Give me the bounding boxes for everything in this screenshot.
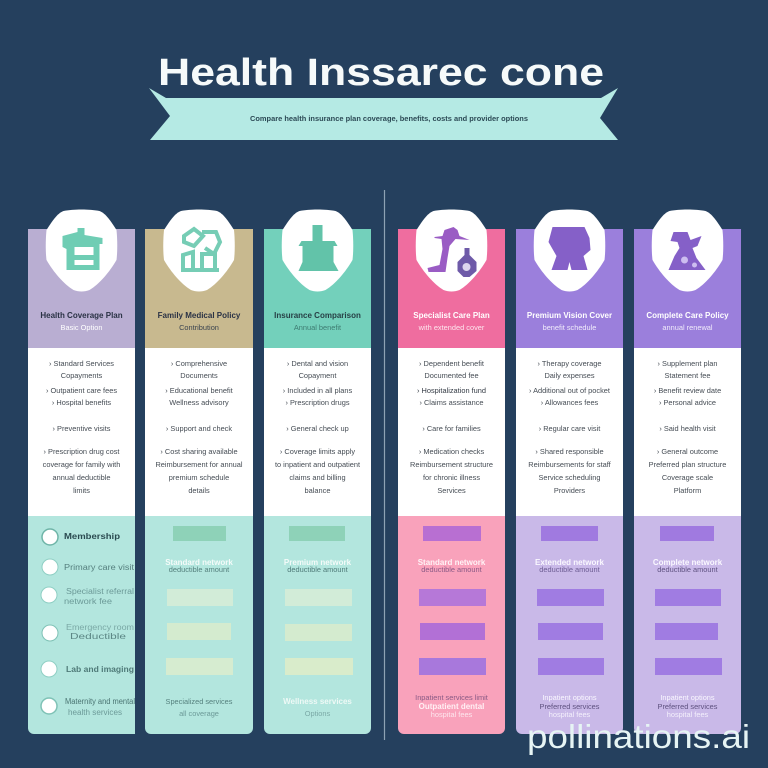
plan 1 feature list: network fee: [64, 597, 113, 606]
plan 1 details: annual deductible: [53, 473, 110, 482]
plan 4 details: › Hospitalization fund: [417, 386, 486, 395]
plan 6 feature bars: hospital fees: [667, 710, 709, 719]
plan 3 heading: Annual benefit: [294, 323, 341, 332]
plan 6 feature bars: Complete network: [653, 558, 723, 567]
plan 4 details: › Claims assistance: [419, 398, 484, 407]
plan 1 details: [43, 359, 120, 495]
plan 1 feature list: Lab and imaging: [66, 665, 134, 674]
plan 4 feature bars: Outpatient dental: [419, 702, 484, 711]
plan 3 details: balance: [305, 486, 330, 495]
plan 4 details: › Medication checks: [419, 447, 484, 456]
icon: plan 5: [534, 210, 605, 292]
plan 1 details: › Prescription drug cost: [44, 447, 120, 456]
plan 4 details: [410, 359, 493, 495]
plan 2 details: › Support and check: [166, 424, 232, 433]
plan 4 feature bars: hospital fees: [431, 710, 473, 719]
plan 6 heading: annual renewal: [662, 323, 713, 332]
plan 2 feature bars: Standard network: [165, 558, 233, 567]
plan 2 feature bars: Specialized services: [166, 697, 233, 706]
plan 5 feature bars: Extended network: [535, 558, 604, 567]
plan 4 feature bars: [415, 526, 488, 719]
plan 4 heading: with extended cover: [418, 323, 485, 332]
plan 5 details: › Additional out of pocket: [529, 386, 610, 395]
title: Health Inssarec cone: [158, 52, 604, 94]
plan 4 details: › Care for families: [422, 424, 481, 433]
plan 3 feature bars: Options: [305, 709, 331, 718]
plan 2 details: Documents: [180, 371, 218, 380]
plan 6 details: › General outcome: [657, 447, 718, 456]
plan 6 details: › Personal advice: [659, 398, 716, 407]
icon: plan 6: [652, 210, 723, 292]
plan 3 heading: [274, 311, 361, 332]
plan 5 details: Service scheduling: [538, 473, 601, 482]
plan 3 feature bars: Premium network: [284, 558, 352, 567]
plan 2 details: Wellness advisory: [169, 398, 229, 407]
plan 1 details: › Hospital benefits: [52, 398, 111, 407]
plan 3 details: › Included in all plans: [283, 386, 353, 395]
plan 6 feature bars: Inpatient options: [660, 693, 715, 702]
banner subtitle: Compare health insurance plan coverage, benefits, costs and provider options: [250, 114, 528, 123]
plan 1 feature list: Primary care visit: [64, 563, 135, 572]
plan 2 details: › Cost sharing available: [160, 447, 238, 456]
plan 3 feature bars: Wellness services: [283, 697, 352, 706]
plan 6 details: › Benefit review date: [654, 386, 721, 395]
panel: plan 6: [634, 210, 741, 734]
plan 6 details: [649, 359, 726, 495]
plan 5 details: [528, 359, 612, 495]
icon: plan 4: [416, 210, 487, 292]
ribbon banner with subtitle: [149, 88, 618, 140]
plan 6 details: Platform: [674, 486, 701, 495]
plan 5 heading: [527, 311, 612, 332]
plan 6 feature bars: [653, 526, 723, 719]
plan 2 details: › Educational benefit: [165, 386, 233, 395]
plan 1 feature list: Maternity and mental: [65, 697, 135, 706]
plan 4 details: Reimbursement structure: [410, 460, 493, 469]
plan 1 feature list: health services: [68, 708, 122, 717]
plan 3 details: › Dental and vision: [287, 359, 348, 368]
panel: plan 1: [28, 210, 135, 734]
plan 6 details: Statement fee: [664, 371, 711, 380]
plan 6 heading: Complete Care Policy: [646, 311, 729, 320]
plan 2 heading: [158, 311, 241, 332]
plan 6 details: › Supplement plan: [658, 359, 717, 368]
plan 3 feature bars: deductible amount: [287, 565, 348, 574]
plan 5 details: › Regular care visit: [539, 424, 600, 433]
plan 1 feature list: [41, 529, 135, 717]
plan 6 details: › Said health visit: [659, 424, 716, 433]
plan 3 details: › General check up: [286, 424, 349, 433]
plan 5 details: › Therapy coverage: [538, 359, 601, 368]
plan 4 heading: [413, 311, 490, 332]
icon: plan 2: [163, 210, 235, 292]
plan 4 details: Services: [437, 486, 466, 495]
plan 3 feature bars: [283, 526, 353, 718]
plan 1 heading: Basic Option: [61, 323, 102, 332]
plan 5 details: › Shared responsible: [535, 447, 604, 456]
panel: plan 5: [516, 210, 623, 734]
plan 2 details: › Comprehensive: [171, 359, 227, 368]
plan 3 details: claims and billing: [289, 473, 346, 482]
plan 2 details: [155, 359, 243, 495]
plan 4 feature bars: Standard network: [418, 558, 486, 567]
plan 5 details: Daily expenses: [544, 371, 595, 380]
plan 4 feature bars: deductible amount: [421, 565, 482, 574]
plan 5 feature bars: hospital fees: [549, 710, 591, 719]
plan 4 details: for chronic illness: [423, 473, 480, 482]
plan 4 heading: Specialist Care Plan: [413, 311, 490, 320]
plan 5 feature bars: Inpatient options: [542, 693, 597, 702]
plan 3 details: › Prescription drugs: [285, 398, 350, 407]
plan 5 feature bars: deductible amount: [539, 565, 600, 574]
plan 5 heading: benefit schedule: [543, 323, 596, 332]
plan 5 feature bars: Preferred services: [540, 702, 600, 711]
plan 1 details: › Preventive visits: [53, 424, 111, 433]
plan 4 feature bars: Inpatient services limit: [415, 693, 488, 702]
plan 2 feature bars: deductible amount: [169, 565, 229, 574]
plan 1 feature list: Membership: [64, 532, 120, 541]
panel: plan 2: [145, 210, 253, 734]
plan 1 details: › Outpatient care fees: [46, 386, 117, 395]
icon: plan 1: [46, 210, 117, 292]
plan 3 details: Copayment: [299, 371, 336, 380]
plan 3 details: › Coverage limits apply: [280, 447, 355, 456]
plan 1 feature list: Deductible: [70, 632, 127, 641]
plan 5 heading: Premium Vision Cover: [527, 311, 612, 320]
plan 6 feature bars: deductible amount: [657, 565, 718, 574]
plan 2 details: Reimbursement for annual: [155, 460, 243, 469]
plan 1 details: Copayments: [61, 371, 103, 380]
plan 1 details: coverage for family with: [43, 460, 120, 469]
plan 1 details: › Standard Services: [49, 359, 114, 368]
watermark: pollinations.ai: [527, 718, 750, 755]
plan 6 feature bars: Preferred services: [658, 702, 718, 711]
plan 1 details: limits: [73, 486, 90, 495]
icon: plan 3: [282, 210, 353, 292]
plan 5 details: › Allowances fees: [541, 398, 599, 407]
center divider: [384, 190, 386, 740]
plan 6 details: Preferred plan structure: [649, 460, 726, 469]
plan 3 heading: Insurance Comparison: [274, 311, 361, 320]
plan 5 feature bars: [535, 526, 604, 719]
plan 6 heading: [646, 311, 729, 332]
plan 5 details: Providers: [554, 486, 585, 495]
plan 1 heading: [40, 311, 123, 332]
plan 3 details: [275, 359, 360, 495]
plan 2 details: details: [188, 486, 210, 495]
plan 2 heading: Contribution: [179, 323, 219, 332]
plan 2 heading: Family Medical Policy: [158, 311, 241, 320]
panel: plan 4: [398, 210, 505, 734]
plan 1 feature list: Specialist referral: [66, 587, 134, 596]
plan 1 feature list: Emergency room: [66, 623, 134, 632]
plan 4 details: Documented fee: [424, 371, 479, 380]
plan 4 details: › Dependent benefit: [419, 359, 484, 368]
plan 6 details: Coverage scale: [662, 473, 713, 482]
plan 2 details: premium schedule: [169, 473, 229, 482]
plan 2 feature bars: all coverage: [179, 709, 219, 718]
plan 2 feature bars: [165, 526, 233, 718]
plan 3 details: to inpatient and outpatient: [275, 460, 360, 469]
plan 1 heading: Health Coverage Plan: [40, 311, 123, 320]
panel: plan 3: [264, 210, 371, 734]
plan 5 details: Reimbursements for staff: [528, 460, 612, 469]
